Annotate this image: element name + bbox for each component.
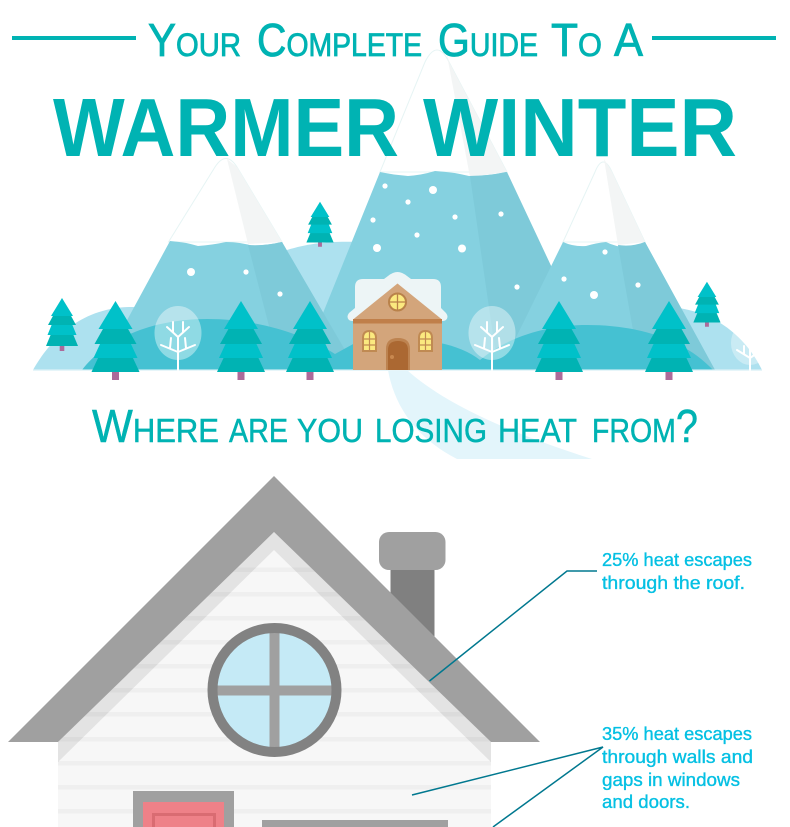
red window <box>133 791 234 827</box>
title line one with rules: A <box>614 14 643 66</box>
house wall <box>58 532 491 827</box>
callout: roof: 25% heat escapes <box>602 550 752 570</box>
chimney <box>379 532 446 650</box>
callout: walls: 35% heat escapes <box>602 724 752 744</box>
section heading: WHERE <box>92 400 219 452</box>
callout: walls: through walls and <box>602 747 753 767</box>
ground <box>0 370 790 470</box>
section heading: LOSING <box>375 412 487 449</box>
title line two <box>53 81 737 174</box>
leader line: roof <box>430 571 597 681</box>
house side windows <box>363 331 432 351</box>
snow dots <box>187 183 641 299</box>
winter landscape illustration <box>0 50 790 470</box>
roof underside shadow <box>58 532 491 762</box>
house gable <box>353 284 442 320</box>
river path <box>388 370 592 459</box>
ground line <box>33 370 762 371</box>
title line one with rules: YOUR <box>148 14 241 66</box>
house snow roof <box>348 272 448 321</box>
title line two: WINTER <box>423 81 737 174</box>
lower frame <box>262 820 448 827</box>
round attic window <box>212 628 336 752</box>
house door <box>386 338 410 370</box>
title line one with rules: TO <box>551 14 602 66</box>
light background hills <box>33 242 762 370</box>
mountain: left <box>100 158 345 370</box>
title line one with rules <box>12 14 776 66</box>
callout: roof: through the roof. <box>602 573 745 593</box>
teal foreground hills <box>82 319 713 370</box>
section heading <box>92 400 698 452</box>
roof <box>8 476 540 742</box>
mountain: centre <box>300 50 600 370</box>
callout: roof <box>602 550 752 593</box>
section heading: YOU <box>297 412 363 449</box>
large house illustration <box>8 476 540 827</box>
section heading: HEAT <box>498 412 577 449</box>
title line two: WARMER <box>53 81 399 174</box>
title line one with rules: GUIDE <box>438 14 538 66</box>
pine trees <box>46 202 721 380</box>
wall siding <box>58 568 491 814</box>
house round window <box>389 294 406 310</box>
callout: walls: gaps in windows <box>602 770 740 790</box>
round bare trees <box>154 306 769 370</box>
house wall <box>353 323 442 370</box>
section heading: ARE <box>229 412 288 449</box>
section heading: FROM? <box>592 400 698 452</box>
small house <box>348 272 448 370</box>
mountain: right <box>500 159 715 370</box>
leader lines: walls <box>412 747 603 827</box>
callout: walls: and doors. <box>602 792 690 812</box>
callout: walls <box>602 724 753 812</box>
title line one with rules: COMPLETE <box>257 14 422 66</box>
